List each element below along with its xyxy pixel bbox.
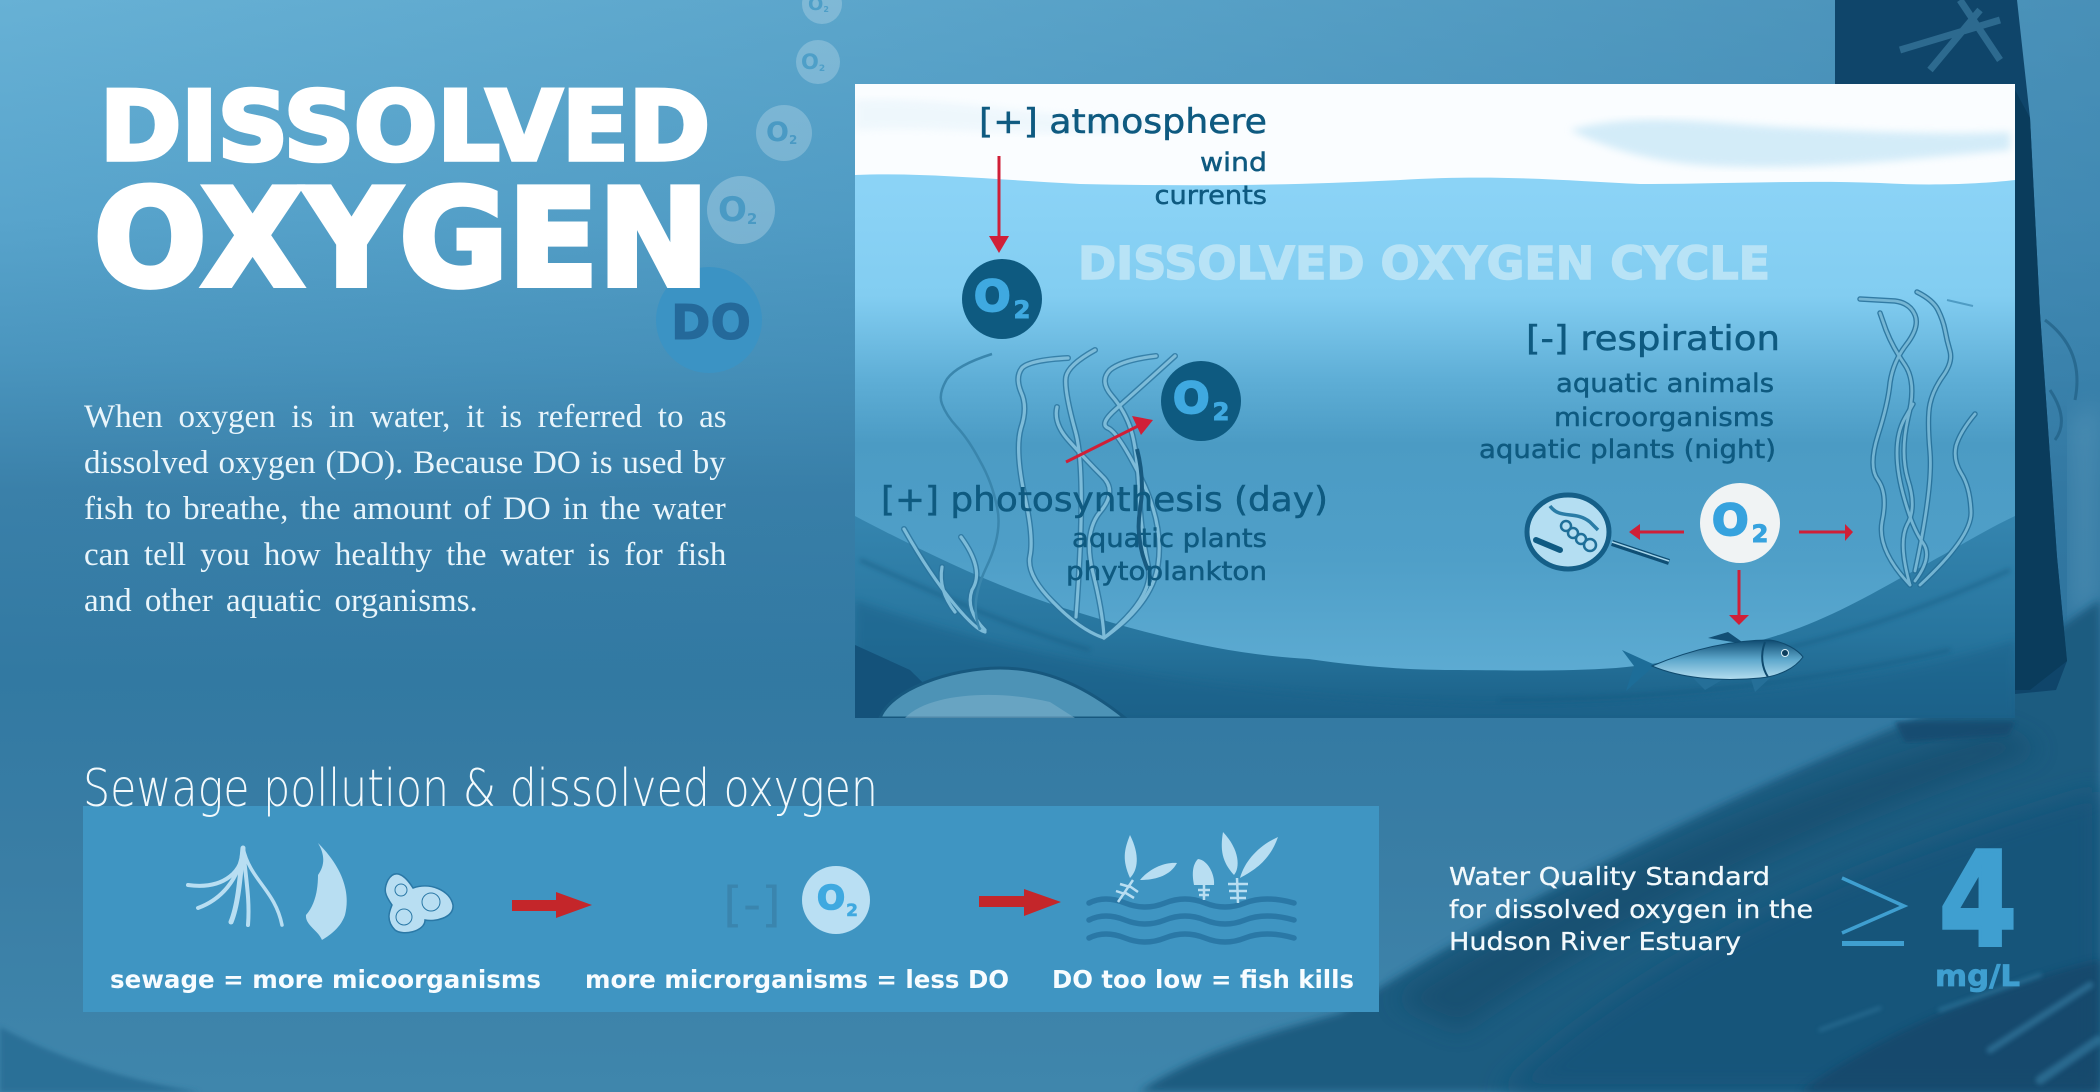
cycle heading: DISSOLVED OXYGEN CYCLE bbox=[1078, 237, 1770, 290]
icon: O2 from atmosphere: O bbox=[974, 272, 1011, 322]
icon: O2 from photosynthesis bbox=[1161, 361, 1241, 441]
intro paragraph: fish to breathe, the amount of DO in the water bbox=[84, 491, 726, 527]
icon: shrimp-like organism bbox=[306, 843, 347, 940]
icon: three-lobed cell bbox=[385, 874, 453, 933]
respiration label bbox=[1479, 319, 1780, 465]
intro paragraph: and other aquatic organisms. bbox=[84, 583, 478, 619]
standard value: at least 4 mg/L: mg/L bbox=[1935, 959, 2020, 993]
title: OXYGEN bbox=[94, 161, 709, 317]
arrow: photosynthesis to O2 bbox=[1066, 416, 1153, 462]
kelp: respiration plants bbox=[1860, 292, 1975, 585]
arrows: O2 to consumers bbox=[1629, 524, 1853, 625]
respiration label: microorganisms bbox=[1554, 403, 1774, 433]
photosynthesis label bbox=[881, 480, 1328, 587]
photosynthesis label: phytoplankton bbox=[1066, 557, 1267, 587]
icon: fish skeletons over waves bbox=[1089, 832, 1294, 942]
icon: O2 from atmosphere bbox=[962, 259, 1042, 339]
bubble: O2 third: 2 bbox=[789, 133, 797, 147]
bubbles rising bbox=[656, 0, 842, 373]
water quality standard text: for dissolved oxygen in the bbox=[1449, 895, 1813, 924]
bubble: O2 third: O bbox=[766, 117, 789, 148]
panel: dissolved oxygen cycle bbox=[83, 84, 2020, 1012]
atmosphere label: [+] atmosphere bbox=[979, 102, 1267, 142]
title bbox=[94, 72, 710, 317]
respiration label: [-] respiration bbox=[1526, 319, 1780, 359]
bubble: O2 second bbox=[796, 40, 840, 84]
bubble: O2 second: 2 bbox=[819, 64, 825, 74]
intro paragraph: When oxygen is in water, it is referred to as bbox=[84, 399, 727, 435]
standard value: at least 4 mg/L: 4 bbox=[1939, 824, 2017, 976]
respiration label: aquatic animals bbox=[1556, 369, 1774, 399]
bubble: DO: DO bbox=[671, 295, 751, 351]
rock bbox=[855, 645, 1125, 718]
arrow: sewage to less DO bbox=[512, 892, 592, 918]
bubble: O2 third bbox=[756, 105, 812, 161]
intro paragraph: can tell you how healthy the water is for fish bbox=[84, 537, 727, 573]
bubble: O2 fourth: 2 bbox=[747, 210, 757, 228]
bubble: O2 second: O bbox=[801, 50, 819, 74]
photosynthesis label: [+] photosynthesis (day) bbox=[881, 480, 1328, 520]
water quality standard text bbox=[1449, 862, 1813, 956]
sewage chain captions: sewage = more micoorganisms bbox=[110, 965, 541, 994]
icon: O2 consumed: O bbox=[1712, 496, 1749, 546]
icon: O2 consumed bbox=[1700, 483, 1780, 563]
icon: minus O2: [-] bbox=[723, 877, 781, 933]
sewage chain captions: more microrganisms = less DO bbox=[585, 965, 1009, 994]
icon: tentacled organism bbox=[188, 848, 282, 925]
arrow: less DO to fish kills bbox=[979, 889, 1061, 916]
intro paragraph: dissolved oxygen (DO). Because DO is used by bbox=[84, 445, 726, 481]
sewage chain captions: DO too low = fish kills bbox=[1052, 965, 1354, 994]
title: DISSOLVED bbox=[100, 72, 710, 182]
water quality standard text: Water Quality Standard bbox=[1449, 862, 1770, 891]
atmosphere label: currents bbox=[1154, 181, 1267, 211]
sewage chain captions bbox=[110, 965, 1354, 994]
respiration label: aquatic plants (night) bbox=[1479, 435, 1776, 465]
icon: O2 from photosynthesis: O bbox=[1173, 374, 1210, 424]
bubble: O2 top: 2 bbox=[823, 5, 829, 14]
panel: sewage chain bbox=[83, 806, 1379, 1012]
icon: minus O2: 2 bbox=[846, 901, 858, 921]
icon: O2 from atmosphere: 2 bbox=[1014, 296, 1030, 324]
intro paragraph bbox=[84, 399, 727, 619]
atmosphere label: wind bbox=[1200, 148, 1267, 178]
atmosphere label bbox=[979, 102, 1267, 211]
icon: magnifier with microorganisms bbox=[1527, 495, 1669, 569]
arrow: atmosphere to O2 bbox=[989, 156, 1009, 253]
bubble: DO bbox=[656, 267, 762, 373]
standard value: at least 4 mg/L bbox=[1842, 824, 2020, 993]
icon: fish bbox=[1622, 632, 1803, 692]
bubble: O2 top bbox=[802, 0, 842, 24]
water quality standard text: Hudson River Estuary bbox=[1449, 927, 1741, 956]
icon: minus O2: O bbox=[817, 878, 845, 917]
icon: O2 consumed: 2 bbox=[1752, 520, 1768, 548]
section heading: sewage pollution: Sewage pollution & dissolved oxygen bbox=[83, 759, 878, 819]
kelp: photosynthesis plants bbox=[904, 350, 1175, 638]
icon: O2 from photosynthesis: 2 bbox=[1213, 398, 1229, 426]
bubble: O2 fourth: O bbox=[718, 190, 747, 230]
bubble: O2 fourth bbox=[707, 176, 775, 244]
icon: minus O2 bbox=[723, 866, 870, 934]
photosynthesis label: aquatic plants bbox=[1072, 524, 1267, 554]
